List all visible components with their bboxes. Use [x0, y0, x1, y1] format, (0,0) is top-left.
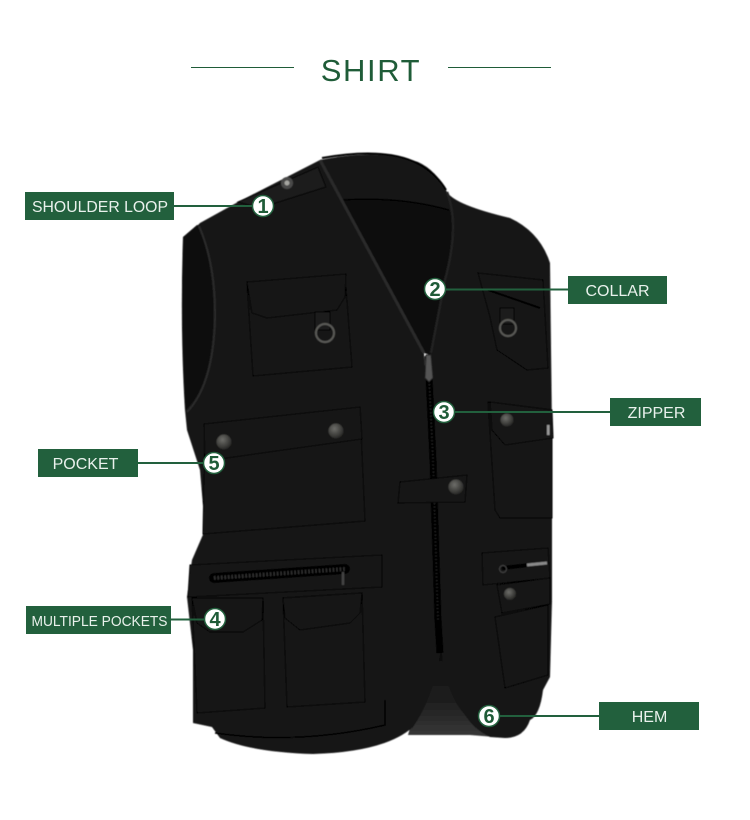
callout 6: hem: HEM [632, 709, 667, 726]
callout 5: pocket: 5 [208, 453, 220, 475]
lower left zip band [188, 555, 382, 597]
callout 1: shoulder loop [25, 192, 274, 220]
callout 4: multiple pockets: 4 [209, 609, 221, 631]
lower right pocket [495, 605, 548, 688]
callout 4: multiple pockets: MULTIPLE POCKETS [32, 613, 168, 630]
vest photo illustration [182, 154, 553, 754]
callout 3: zipper: ZIPPER [628, 405, 685, 422]
upper right pocket [478, 273, 548, 370]
upper left pocket [247, 275, 352, 376]
callout 6: hem [478, 702, 699, 730]
callout 2: collar: 2 [429, 279, 441, 301]
lower right zip band [482, 548, 550, 585]
zipper [428, 356, 440, 653]
middle left pocket [203, 408, 365, 534]
callout 1: shoulder loop: SHOULDER LOOP [32, 199, 168, 216]
callout 3: zipper: 3 [438, 402, 450, 424]
callout 6: hem: 6 [483, 706, 495, 728]
callout 4: multiple pockets [26, 606, 226, 634]
shoulder loop [238, 167, 326, 208]
armhole binding [187, 226, 215, 412]
lower left pockets [192, 598, 265, 713]
callout 5: pocket: POCKET [53, 456, 119, 473]
callout 3: zipper [434, 398, 701, 426]
neck binding [320, 160, 424, 353]
callout 2: collar: COLLAR [585, 283, 650, 300]
back panel and armhole interior [182, 225, 215, 420]
right front body [430, 192, 552, 738]
callout 5: pocket [38, 449, 224, 477]
middle right pocket [488, 402, 552, 518]
callout 2: collar [424, 276, 667, 304]
left front body [185, 160, 440, 754]
callout 1: shoulder loop: 1 [257, 196, 269, 218]
strap with snap [398, 475, 467, 503]
title: SHIRT: SHIRT [321, 53, 421, 88]
